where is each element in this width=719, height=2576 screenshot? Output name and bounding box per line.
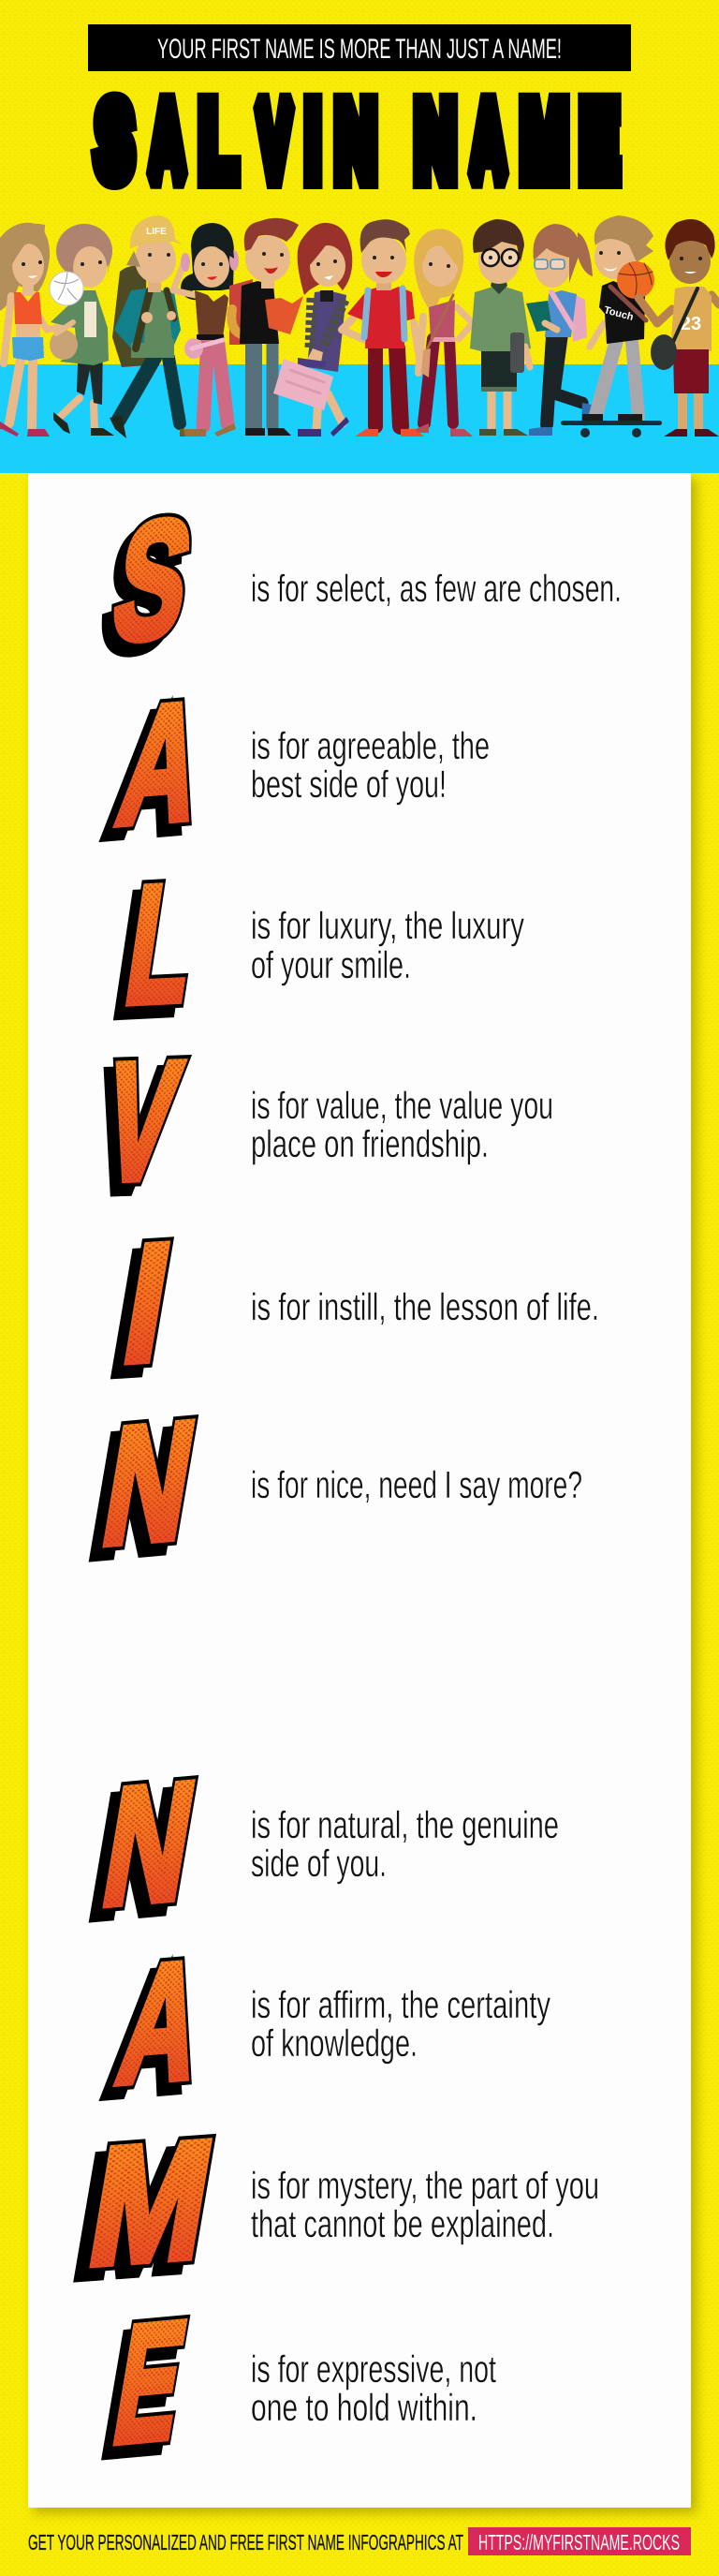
re-draw floor edge above panel shadow xyxy=(0,450,719,473)
title: SALVIN NAME: A xyxy=(470,81,506,200)
text: A lines: is for agreeable, the xyxy=(251,724,490,767)
text: A lines xyxy=(251,1983,550,2065)
letter E: E xyxy=(104,2286,197,2478)
row: A xyxy=(98,666,490,869)
letter N: N xyxy=(93,1386,206,1580)
letter I: I xyxy=(112,1209,182,1398)
letter L: L xyxy=(116,850,205,1039)
letter A: A xyxy=(109,1925,214,2119)
letter A: A xyxy=(109,666,214,860)
title: SALVIN NAME: E xyxy=(580,80,619,201)
illustration: group of young people xyxy=(0,215,719,438)
text: A lines: of knowledge. xyxy=(251,2021,418,2065)
letter I: I xyxy=(103,1220,171,1407)
text: V lines xyxy=(251,1084,553,1165)
row: S xyxy=(93,483,622,686)
text: N lines: is for natural, the genuine xyxy=(251,1803,559,1846)
row: E xyxy=(95,2286,496,2488)
person 9: boy with glasses, green shirt and laptop xyxy=(470,219,531,436)
letter E: E xyxy=(95,2296,187,2488)
title: SALVIN NAME: S xyxy=(95,81,134,201)
person 10: girl with ponytail, blue glasses and pink backpack xyxy=(526,224,593,436)
text: E lines: one to hold within. xyxy=(251,2386,477,2429)
letter A: A xyxy=(98,1935,205,2128)
title: SALVIN NAME: I xyxy=(305,81,320,201)
letter V: V xyxy=(92,1029,190,1216)
letter S: S xyxy=(93,494,194,686)
row: A (second word) xyxy=(98,1925,550,2128)
letter N: N xyxy=(93,1747,206,1941)
title: SALVIN NAME: L xyxy=(199,81,237,201)
white content panel with shadow xyxy=(28,473,697,2513)
title: SALVIN NAME: N xyxy=(335,81,376,201)
letter M: M xyxy=(66,2115,212,2310)
letter A: A xyxy=(109,1925,214,2119)
letter S: S xyxy=(103,483,203,676)
person 11: skater with basketball: Touch xyxy=(603,304,635,323)
letter L: L xyxy=(107,860,196,1048)
letter N: N xyxy=(81,1397,196,1591)
letter I: I xyxy=(112,1209,182,1398)
letter A: A xyxy=(109,1925,214,2119)
person 7: boy in red shirt with blue straps xyxy=(342,219,424,437)
person 3: boy with cap and backpack: LIFE xyxy=(146,227,167,237)
row: M xyxy=(66,2105,599,2310)
letter A: A xyxy=(109,666,214,860)
letter A: A xyxy=(109,666,214,860)
person 8: blonde girl with shoulder bag xyxy=(414,229,473,437)
letter M: M xyxy=(79,2105,224,2300)
blue floor band xyxy=(0,364,719,473)
person 4: girl with headphones xyxy=(173,223,239,437)
text: A lines: best side of you! xyxy=(251,762,447,806)
person 11: skater with basketball xyxy=(561,215,662,437)
letter M: M xyxy=(79,2105,224,2300)
text: A lines: is for affirm, the certainty xyxy=(251,1983,550,2026)
text: A lines xyxy=(251,724,490,806)
row: I xyxy=(103,1209,599,1407)
letter V: V xyxy=(92,1029,190,1216)
title: SALVIN NAME: M xyxy=(521,81,568,201)
letter E: E xyxy=(104,2286,197,2478)
letter A: A xyxy=(98,676,205,869)
letter N: N xyxy=(93,1386,206,1580)
letter I: I xyxy=(112,1209,182,1398)
letter M: M xyxy=(79,2105,224,2300)
person 6: girl with red hair and pink bag xyxy=(273,223,352,437)
letter E: E xyxy=(104,2286,197,2478)
person 5: boy with backpack and book xyxy=(229,218,303,436)
text: L lines: of your smile. xyxy=(251,943,411,986)
text: L lines xyxy=(251,904,524,986)
text: V lines: place on friendship. xyxy=(251,1122,489,1165)
title: SALVIN NAME xyxy=(95,80,619,202)
person 2: girl with volleyball and bag xyxy=(50,224,114,436)
letter S: S xyxy=(103,483,203,676)
text: E lines xyxy=(251,2347,496,2429)
text: N line: is for nice, need I say more? xyxy=(251,1463,582,1506)
letter L: L xyxy=(116,850,205,1039)
row: N xyxy=(81,1386,582,1591)
person 1: girl in orange top xyxy=(0,223,73,437)
letter S: S xyxy=(103,483,203,676)
text: N lines: side of you. xyxy=(251,1842,387,1885)
letter V: V xyxy=(92,1029,190,1216)
letter N: N xyxy=(93,1747,206,1941)
person 3: boy with cap and backpack xyxy=(110,215,206,438)
title: SALVIN NAME: N xyxy=(415,81,456,201)
row: N (second word) xyxy=(81,1747,559,1951)
text: N lines xyxy=(251,1803,559,1885)
letter N: N xyxy=(93,1386,206,1580)
letter V: V xyxy=(82,1038,181,1225)
letter N: N xyxy=(81,1757,196,1951)
text: M lines: that cannot be explained. xyxy=(251,2202,554,2245)
row: V xyxy=(82,1029,553,1225)
title: SALVIN NAME: A xyxy=(150,81,185,200)
letter N: N xyxy=(93,1747,206,1941)
person 12: boy in tank top with shoulder bag xyxy=(638,219,719,437)
header banner: tagline xyxy=(88,24,631,71)
text: E lines: is for expressive, not xyxy=(251,2347,496,2391)
text: V lines: is for value, the value you xyxy=(251,1084,553,1127)
person 12: boy in tank top with shoulder bag: 23 xyxy=(681,314,701,334)
title: SALVIN NAME: V xyxy=(257,82,291,202)
row: L xyxy=(107,850,524,1048)
letter L: L xyxy=(116,850,205,1039)
text: L lines: is for luxury, the luxury xyxy=(251,904,524,947)
text: M lines xyxy=(251,2164,599,2245)
